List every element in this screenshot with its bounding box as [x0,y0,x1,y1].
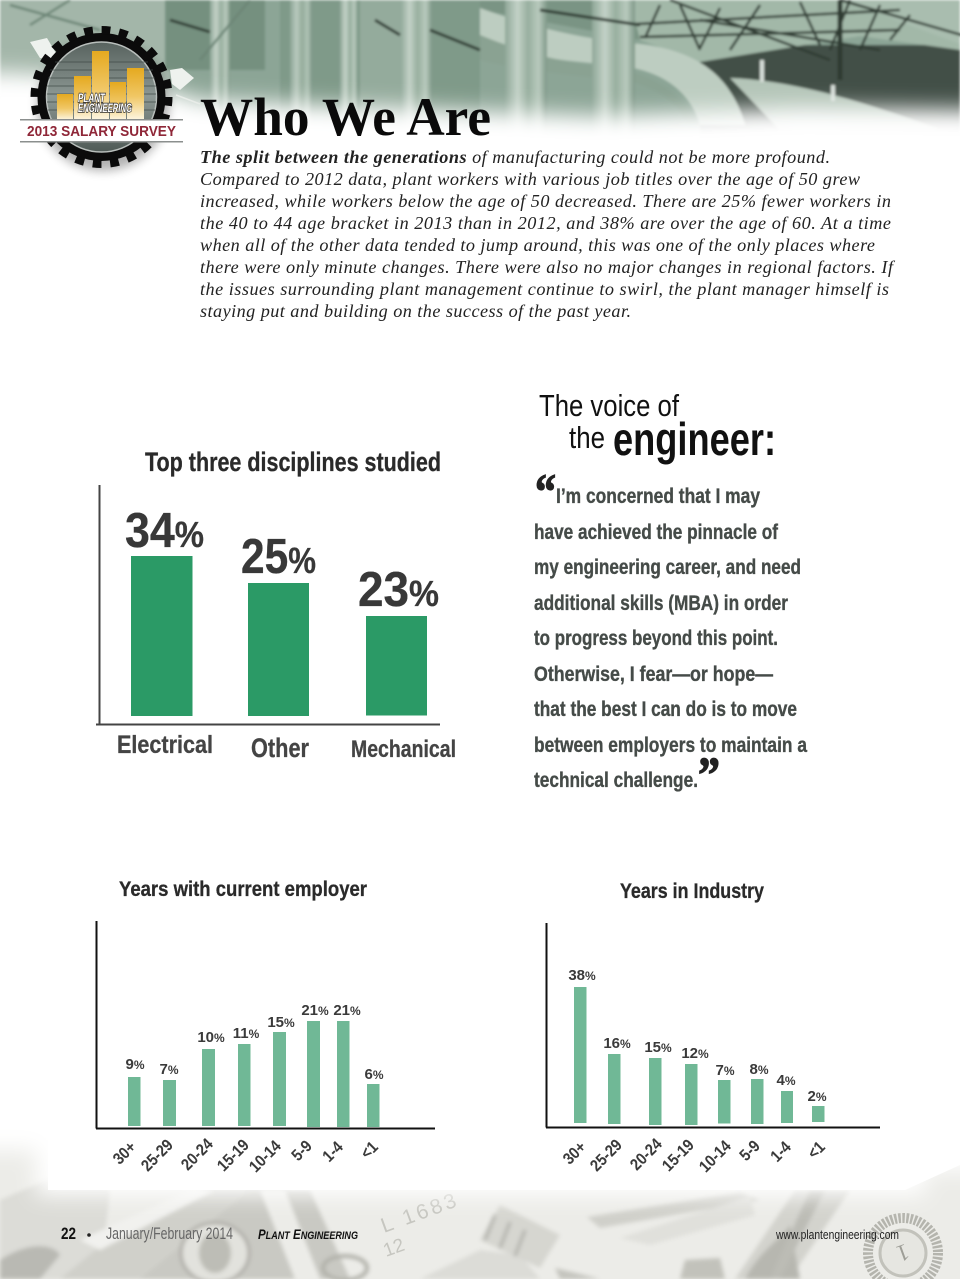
bars [131,556,427,716]
value labels: 12% [681,1045,709,1062]
age labels: 20-24 [178,1135,217,1174]
engineer quote: “ [535,463,556,519]
value labels: 7% [715,1062,735,1079]
value labels: 21% [301,1002,329,1019]
category labels: Other [251,733,309,763]
age labels: 20-24 [627,1135,666,1174]
age labels: 15-19 [659,1136,698,1175]
value labels: 8% [749,1061,769,1078]
footer: folio and publication: 22 [61,1224,76,1243]
chart title: Years with current employer [119,877,368,901]
callout heading: the voice of the engineer: The voice of [539,388,679,423]
age labels: 15-19 [214,1136,253,1175]
white panel behind charts [48,1100,960,1190]
value labels: 34% [125,504,204,558]
chart: top three disciplines studied [96,447,456,763]
engineer quote [534,463,807,802]
callout heading: the voice of the engineer: the [569,420,605,455]
value labels: 6% [364,1066,384,1083]
chart title: Years in Industry [620,879,764,903]
intro paragraph: staying put and building on the success of the past year. [200,301,631,321]
value labels: 21% [333,1002,361,1019]
intro paragraph: the 40 to 44 age bracket in 2013 than in 2012, and 38% are over the age of 60. At a time [200,213,891,233]
value labels [125,504,439,617]
intro paragraph: Compared to 2012 data, plant workers with various job titles over the age of 50 grew [200,169,860,189]
value labels: 23% [358,563,439,617]
age labels [110,1135,382,1176]
value labels: 15% [267,1014,295,1031]
logo bar chart [57,51,144,120]
value labels: 9% [125,1056,145,1073]
footer: folio and publication [61,1224,899,1243]
age labels: 25-29 [138,1136,177,1175]
logo: 2013 salary survey gear badge [20,30,200,171]
intro paragraph [200,147,896,321]
logo wordmark: ENGINEERING [78,103,132,115]
value labels: 11% [233,1025,260,1042]
value labels: 15% [644,1039,672,1056]
footer: folio and publication: PLANT ENGINEERING [258,1226,358,1242]
age labels: <1 [358,1138,382,1163]
engineer quote: ” [698,746,720,802]
logo banner: 2013 SALARY SURVEY [27,123,176,140]
engineer quote: to progress beyond this point. [534,627,778,650]
intro paragraph: The split between the generations of manufacturing could not be more profound. [200,147,830,167]
age labels: 5-9 [288,1137,316,1165]
value labels: 16% [603,1035,631,1052]
logo banner [20,119,183,142]
callout heading: the voice of the engineer [539,388,776,465]
intro paragraph: when all of the other data tended to jump around, this was one of the only places where [200,235,875,255]
bank-note footer background: L 1683 [378,1188,462,1238]
intro paragraph: the issues surrounding plant management continue to swirl, the plant manager himself is [200,279,889,299]
value labels: 4% [776,1072,796,1089]
value labels: 7% [159,1061,179,1078]
age labels: 1-4 [319,1138,347,1166]
value labels: 10% [197,1029,225,1046]
callout heading: the voice of the engineer: engineer: [613,413,776,465]
engineer quote: have achieved the pinnacle of [534,521,779,544]
engineer quote: I’m concerned that I may [556,485,760,508]
bars [574,987,824,1125]
age labels: 10-14 [246,1137,285,1176]
value labels [568,967,827,1105]
engineer quote: between employers to maintain a [534,734,807,757]
footer: folio and publication: January/February 2014 [106,1224,233,1243]
age labels: 25-29 [587,1136,626,1175]
seal on bank note: 1 [893,1238,913,1266]
title: Who We Are [200,87,491,147]
age labels [560,1135,829,1176]
bank-note footer background: 12 [381,1235,408,1262]
footer: folio and publication: www.plantengineering.com [775,1228,899,1242]
chart title: Top three disciplines studied [145,447,441,477]
chart: years in industry [546,879,880,1176]
logo wordmark [78,91,132,115]
age labels: 5-9 [736,1137,764,1165]
age labels: 1-4 [767,1138,795,1166]
bank-note footer background [0,1146,960,1279]
category labels: Mechanical [351,736,456,763]
bars [128,1021,380,1127]
intro paragraph: increased, while workers below the age of 50 decreased. There are 25% fewer workers in [200,191,891,211]
category labels: Electrical [117,731,213,759]
intro paragraph: there were only minute changes. There were also no major changes in regional factors. If [200,257,896,277]
logo wordmark: PLANT [78,91,106,105]
value labels: 2% [807,1088,827,1105]
value labels [125,1002,384,1083]
category labels [117,731,456,763]
age labels: <1 [805,1138,829,1163]
engineer quote: that the best I can do is to move [534,698,797,721]
age labels: 10-14 [696,1137,735,1176]
engineer quote: Otherwise, I fear—or hope— [534,663,773,686]
header photo: pipes and trusses [0,0,960,131]
value labels: 25% [241,530,316,584]
seal on bank note [868,1218,938,1279]
age labels: 30+ [110,1138,140,1168]
engineer quote: additional skills (MBA) in order [534,592,788,615]
value labels: 38% [568,967,596,984]
chart: years with current employer [96,877,435,1176]
engineer quote: my engineering career, and need [534,556,801,579]
age labels: 30+ [560,1138,590,1168]
engineer quote: technical challenge. [534,769,698,792]
